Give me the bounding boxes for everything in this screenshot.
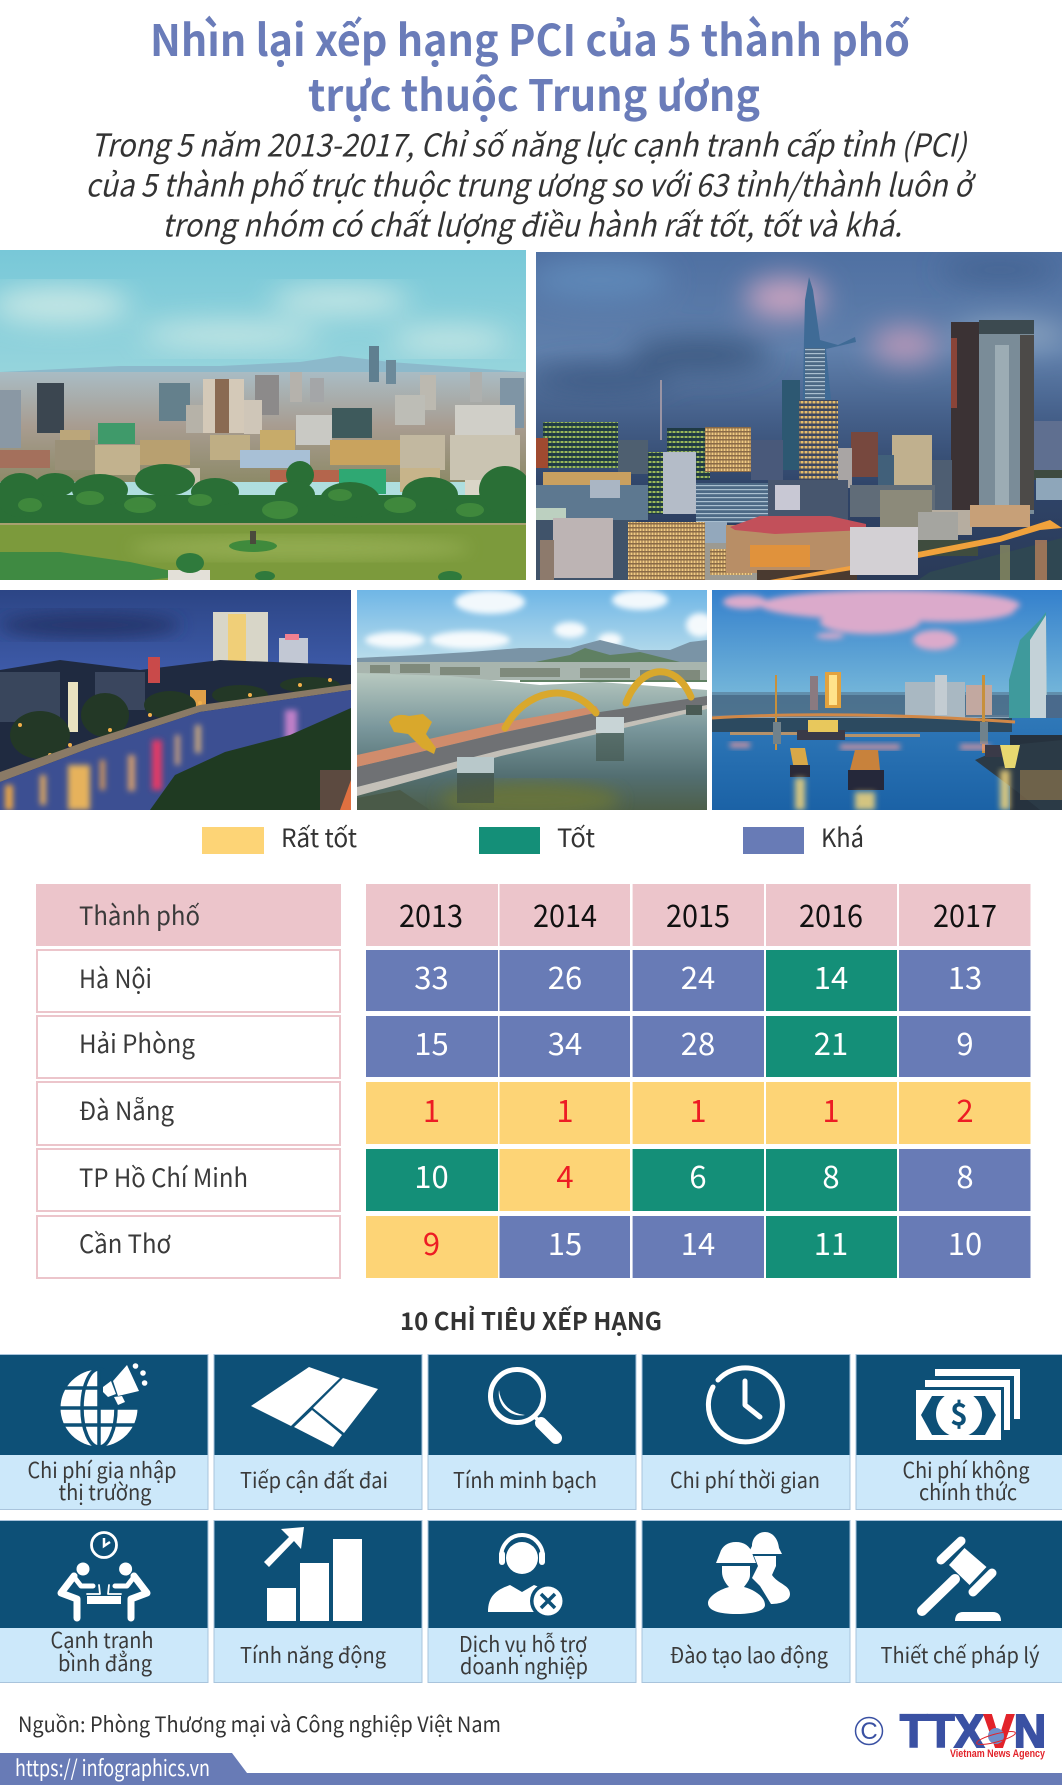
photo: Saigon river bridge at dusk [712,590,1062,810]
legend item: good [479,818,595,855]
label [459,1628,588,1681]
footer bar with url tab: https:// infographics.vn [15,1751,210,1783]
row: TP Hồ Chí Minh [37,1149,1030,1211]
ranking table [36,884,1030,1278]
icon: headset agent with tools [488,1535,566,1619]
title [150,6,910,124]
row: Hà Nội: 24 [681,953,715,998]
table header: 2015 [666,891,730,936]
row: Hà Nội [37,950,1030,1012]
row: Đà Nẵng: 1 [423,1086,440,1131]
table header: 2017 [933,891,997,936]
icon: banknotes: $ [950,1390,968,1434]
row: Cần Thơ: 9 [423,1219,440,1264]
row: Hải Phòng: 15 [414,1019,449,1064]
row: TP Hồ Chí Minh: 8 [822,1152,840,1197]
icon: workers with helmets [708,1532,790,1614]
row: Đà Nẵng: 2 [956,1086,974,1131]
label [902,1454,1030,1507]
legend item: fair [743,818,864,855]
logo: TTXVN Vietnam News Agency: TTXVN [900,1705,1046,1757]
row: TP Hồ Chí Minh: TP Hồ Chí Minh [79,1158,248,1195]
row: Hải Phòng [37,1016,1030,1078]
row: Cần Thơ: 15 [548,1219,582,1264]
row: Hải Phòng: 28 [681,1019,715,1064]
row: TP Hồ Chí Minh: 10 [414,1152,449,1197]
copyright symbol [856,1718,882,1745]
legend item: fair: Khá [821,818,864,855]
source note: Nguồn: Phòng Thương mại và Công nghiệp Việt Nam [18,1709,501,1739]
row: Hải Phòng: Hải Phòng [79,1024,196,1061]
card: legal institutions [856,1520,1062,1683]
row: Hải Phòng: 34 [548,1019,582,1064]
table header: Thành phố [79,896,200,933]
table header [36,884,1030,946]
label: Chi phí không [902,1454,1030,1485]
row: Đà Nẵng: Đà Nẵng [79,1091,175,1128]
intro text block: Trong 5 năm 2013-2017, Chỉ số năng lực cạnh tranh cấp tỉnh (PCI) [90,120,968,166]
label: doanh nghiệp [460,1650,588,1681]
row: Hải Phòng: 21 [814,1019,848,1064]
row: Cần Thơ: 11 [814,1219,848,1264]
row: Đà Nẵng: 1 [556,1086,574,1131]
card: transparency [428,1354,636,1510]
intro text block: của 5 thành phố trực thuộc trung ương so với 63 tỉnh/thành luôn ở [86,160,976,206]
legend item: very good [202,818,357,855]
card: market entry cost [0,1354,208,1510]
card: land access [214,1354,422,1510]
icon: bar chart with arrow [264,1527,362,1621]
row: Hà Nội: 13 [948,953,982,998]
icon: gavel [922,1541,1001,1621]
label: Tiếp cận đất đai [240,1464,388,1495]
row: Đà Nẵng: 1 [689,1086,707,1131]
row: TP Hồ Chí Minh: 4 [556,1152,574,1197]
intro text block [86,120,976,246]
photo: Dragon Bridge in Da Nang [357,590,714,818]
card: time cost [642,1354,850,1510]
icon: banknotes [916,1369,1020,1440]
row: Hải Phòng: 9 [956,1019,974,1064]
row: Đà Nẵng [37,1082,1030,1145]
photo: Hai Phong riverside at night [0,590,351,810]
row: Hà Nội: 14 [814,953,848,998]
legend item: good: Tốt [557,818,595,855]
row: TP Hồ Chí Minh: 6 [689,1152,707,1197]
section heading: 10 CHỈ TIÊU XẾP HẠNG [400,1303,662,1338]
card: dynamism [214,1520,422,1683]
label: Cạnh tranh [50,1624,154,1655]
row: Cần Thơ: 10 [948,1219,982,1264]
label: Tính minh bạch [453,1464,597,1495]
legend item: very good: Rất tốt [281,818,357,855]
card: informal cost [856,1354,1062,1510]
label: Dịch vụ hỗ trợ [459,1628,587,1659]
icon: magnifying glass [490,1370,556,1438]
title: Nhìn lại xếp hạng PCI của 5 thành phố [150,6,910,69]
label [50,1624,154,1678]
card: fair competition [0,1520,208,1683]
footer bar with url tab [0,1751,1062,1785]
photo: Hanoi skyline and lake [0,250,531,583]
row: Cần Thơ [37,1216,1030,1278]
intro text block: trong nhóm có chất lượng điều hành rất tốt, tốt và khá. [162,200,902,246]
row: TP Hồ Chí Minh: 8 [956,1152,974,1197]
icon: clock [708,1368,782,1442]
label: Tính năng động [240,1639,386,1670]
card: labor training [642,1520,850,1683]
table header: 2016 [799,891,863,936]
table header: 2013 [399,891,463,936]
copyright symbol: C [860,1718,878,1745]
icon: two people meeting [61,1532,147,1618]
label: chính thức [919,1476,1017,1507]
row: Hà Nội: Hà Nội [79,959,152,996]
row: Đà Nẵng: 1 [822,1086,840,1131]
label: thị trường [58,1476,152,1507]
label: Chi phí thời gian [670,1464,820,1495]
label: Thiết chế pháp lý [880,1639,1040,1670]
label: bình đẳng [58,1647,152,1678]
table header: 2014 [533,891,597,936]
row: Hà Nội: 33 [414,953,449,998]
legend [202,818,864,855]
card: business support services [428,1520,636,1683]
title: trực thuộc Trung ương [308,61,760,124]
row: Cần Thơ: 14 [681,1219,715,1264]
label: Chi phí gia nhập [28,1454,176,1485]
label: Đào tạo lao động [670,1639,828,1670]
icon: land plots [251,1367,378,1447]
icon: globe with megaphone [60,1363,147,1448]
row: Hà Nội: 26 [548,953,582,998]
photo: Ho Chi Minh City skyline at dusk [530,252,1062,580]
row: Cần Thơ: Cần Thơ [79,1224,171,1261]
label [28,1454,176,1507]
